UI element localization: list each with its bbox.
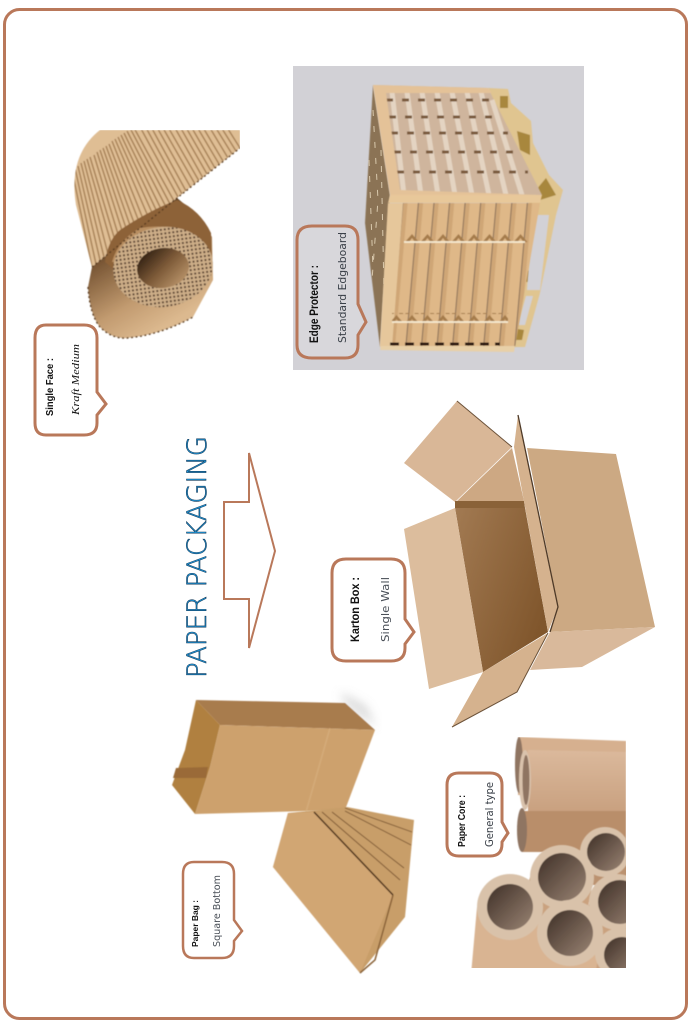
callout: paper bag: Paper Bag : <box>191 900 200 947</box>
square bottom bag <box>172 692 376 814</box>
callout: single face: Single Face : <box>45 358 56 416</box>
image: edge protector on pallet <box>293 66 584 370</box>
image: paper cores <box>471 737 626 968</box>
flat bag stack <box>273 807 414 973</box>
tube ends <box>471 826 626 968</box>
pallet <box>488 88 563 347</box>
callout: paper core <box>447 773 508 856</box>
callout: edge protector: Standard Edgeboard <box>336 232 349 343</box>
callout: edge protector <box>297 226 366 358</box>
callout: paper core: Paper Core : <box>457 795 468 847</box>
upper tubes <box>515 737 626 852</box>
callout: karton box: Single Wall <box>379 577 392 642</box>
image: open karton box <box>404 401 655 727</box>
callout: karton box <box>332 559 414 661</box>
callout: karton box: Karton Box : <box>348 577 362 642</box>
title: PAPER PACKAGING <box>182 436 213 678</box>
callout: paper bag: Square Bottom <box>212 875 223 947</box>
left side of stack <box>365 85 390 347</box>
image: paper bags <box>172 692 414 973</box>
arrow <box>224 453 275 648</box>
callout: paper core: General type <box>483 782 496 847</box>
callout: paper bag <box>183 862 242 958</box>
callout: edge protector: Edge Protector : <box>307 265 321 343</box>
callout: single face: Kraft Medium <box>70 344 82 416</box>
photo background <box>293 66 584 370</box>
front face <box>380 203 540 352</box>
top face <box>373 85 542 203</box>
image: single face corrugated roll <box>74 130 240 340</box>
callout: single face <box>35 325 106 435</box>
